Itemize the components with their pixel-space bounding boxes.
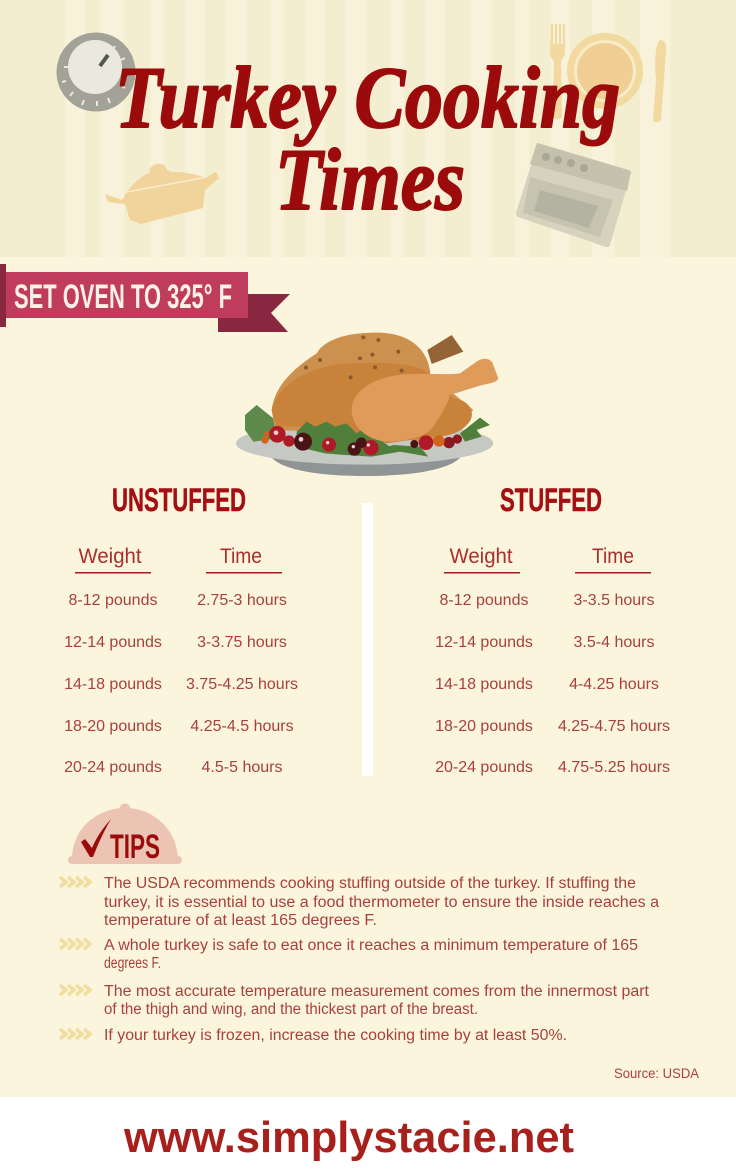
- tips list: turkey, it is essential to use a food thermometer to ensure the inside reaches a: [104, 894, 659, 911]
- footer website: [0, 1097, 736, 1170]
- table: stuffed: 20-24 pounds: [435, 759, 533, 776]
- table: unstuffed: 8-12 pounds: [69, 592, 157, 609]
- icon: tips cloche: TIPS: [110, 828, 160, 866]
- tips list: The USDA recommends cooking stuffing outside of the turkey. If stuffing the: [104, 875, 636, 892]
- header banner: [0, 0, 736, 257]
- table: stuffed: 12-14 pounds: [435, 634, 533, 651]
- icon: plate and cutlery: [550, 24, 666, 122]
- ribbon: oven temperature: [0, 264, 290, 332]
- tips list: temperature of at least 165 degrees F.: [104, 912, 377, 929]
- table: unstuffed: 20-24 pounds: [64, 759, 162, 776]
- table: stuffed: [435, 545, 670, 776]
- title: Turkey Cooking: [115, 50, 620, 147]
- table: unstuffed: [64, 545, 298, 776]
- tips list: A whole turkey is safe to eat once it reaches a minimum temperature of 165: [104, 937, 638, 954]
- table: unstuffed: 12-14 pounds: [64, 634, 162, 651]
- table: stuffed: 4-4.25 hours: [569, 676, 659, 693]
- icon: oven: [516, 143, 631, 247]
- tips list: If your turkey is frozen, increase the cooking time by at least 50%.: [104, 1027, 567, 1044]
- heading: unstuffed: UNSTUFFED: [112, 482, 246, 518]
- table: unstuffed: 18-20 pounds: [64, 718, 162, 735]
- tips list: of the thigh and wing, and the thickest part of the breast.: [104, 1001, 478, 1018]
- table: stuffed: 8-12 pounds: [440, 592, 528, 609]
- table: unstuffed: 3-3.75 hours: [197, 634, 287, 651]
- table: unstuffed: Time: [220, 545, 262, 568]
- icon: oven dial: [56, 32, 136, 112]
- ribbon: oven temperature: SET OVEN TO 325° F: [14, 278, 232, 316]
- illustration: roast turkey on a platter: [236, 333, 498, 476]
- table: unstuffed: 14-18 pounds: [64, 676, 162, 693]
- table: stuffed: 18-20 pounds: [435, 718, 533, 735]
- footer website: www.simplystacie.net: [123, 1113, 574, 1162]
- table: unstuffed: 4.25-4.5 hours: [190, 718, 294, 735]
- table: stuffed: Time: [592, 545, 634, 568]
- table: stuffed: 3-3.5 hours: [574, 592, 654, 609]
- table: unstuffed: Weight: [78, 545, 142, 568]
- table: stuffed: 3.5-4 hours: [574, 634, 654, 651]
- table: stuffed: 4.75-5.25 hours: [558, 759, 670, 776]
- heading: stuffed: STUFFED: [500, 482, 602, 518]
- table: stuffed: Weight: [450, 545, 513, 568]
- tips list: The most accurate temperature measurement comes from the innermost part: [104, 983, 650, 1000]
- title: Times: [275, 132, 465, 229]
- table: stuffed: 4.25-4.75 hours: [558, 718, 670, 735]
- source: Source: USDA: [614, 1065, 700, 1081]
- table: unstuffed: 2.75-3 hours: [197, 592, 287, 609]
- title: [115, 50, 620, 229]
- tips list: degrees F.: [104, 955, 161, 972]
- icon: cooking pot: [105, 164, 219, 224]
- table: unstuffed: 3.75-4.25 hours: [186, 676, 298, 693]
- icon: tips cloche: [68, 804, 182, 866]
- table: stuffed: 14-18 pounds: [435, 676, 533, 693]
- table: unstuffed: 4.5-5 hours: [202, 759, 282, 776]
- tips list: [60, 875, 659, 1044]
